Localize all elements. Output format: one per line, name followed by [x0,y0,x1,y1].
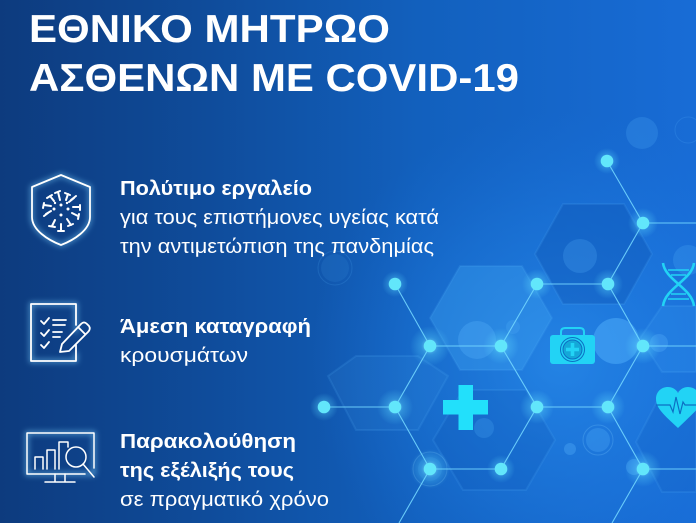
icon: monitor with chart and magnifier [27,433,94,482]
text: valuable tool: την αντιμετώπιση της πανδημίας [120,236,434,258]
text: monitoring progress [120,431,329,511]
icon: heart with pulse [656,387,696,428]
title: ΑΣΘΕΝΩΝ ΜΕ COVID-19 [29,57,519,100]
title [29,8,519,100]
icon: checklist with pencil [31,304,90,361]
icon: shield with virus [32,175,90,245]
text: immediate recording [120,316,311,367]
text: valuable tool: Πολύτιμο εργαλείο [120,178,312,200]
decorative circles [318,117,696,486]
text: valuable tool: για τους επιστήμονες υγείας κατά [120,207,439,229]
icon: medical kit [550,328,595,364]
network nodes [310,148,661,489]
icon: medical cross [443,385,488,430]
text: immediate recording: Άμεση καταγραφή [120,316,311,338]
text: immediate recording: κρουσμάτων [120,345,248,367]
hexagon backdrop shapes [328,204,696,492]
text: valuable tool [120,178,439,258]
text: monitoring progress: της εξέλιξής τους [120,460,294,482]
text: monitoring progress: σε πραγματικό χρόνο [120,489,329,511]
icon: DNA helix [663,263,694,306]
text: monitoring progress: Παρακολούθηση [120,431,296,453]
network connecting lines [324,161,696,523]
title: ΕΘΝΙΚΟ ΜΗΤΡΩΟ [29,8,390,51]
